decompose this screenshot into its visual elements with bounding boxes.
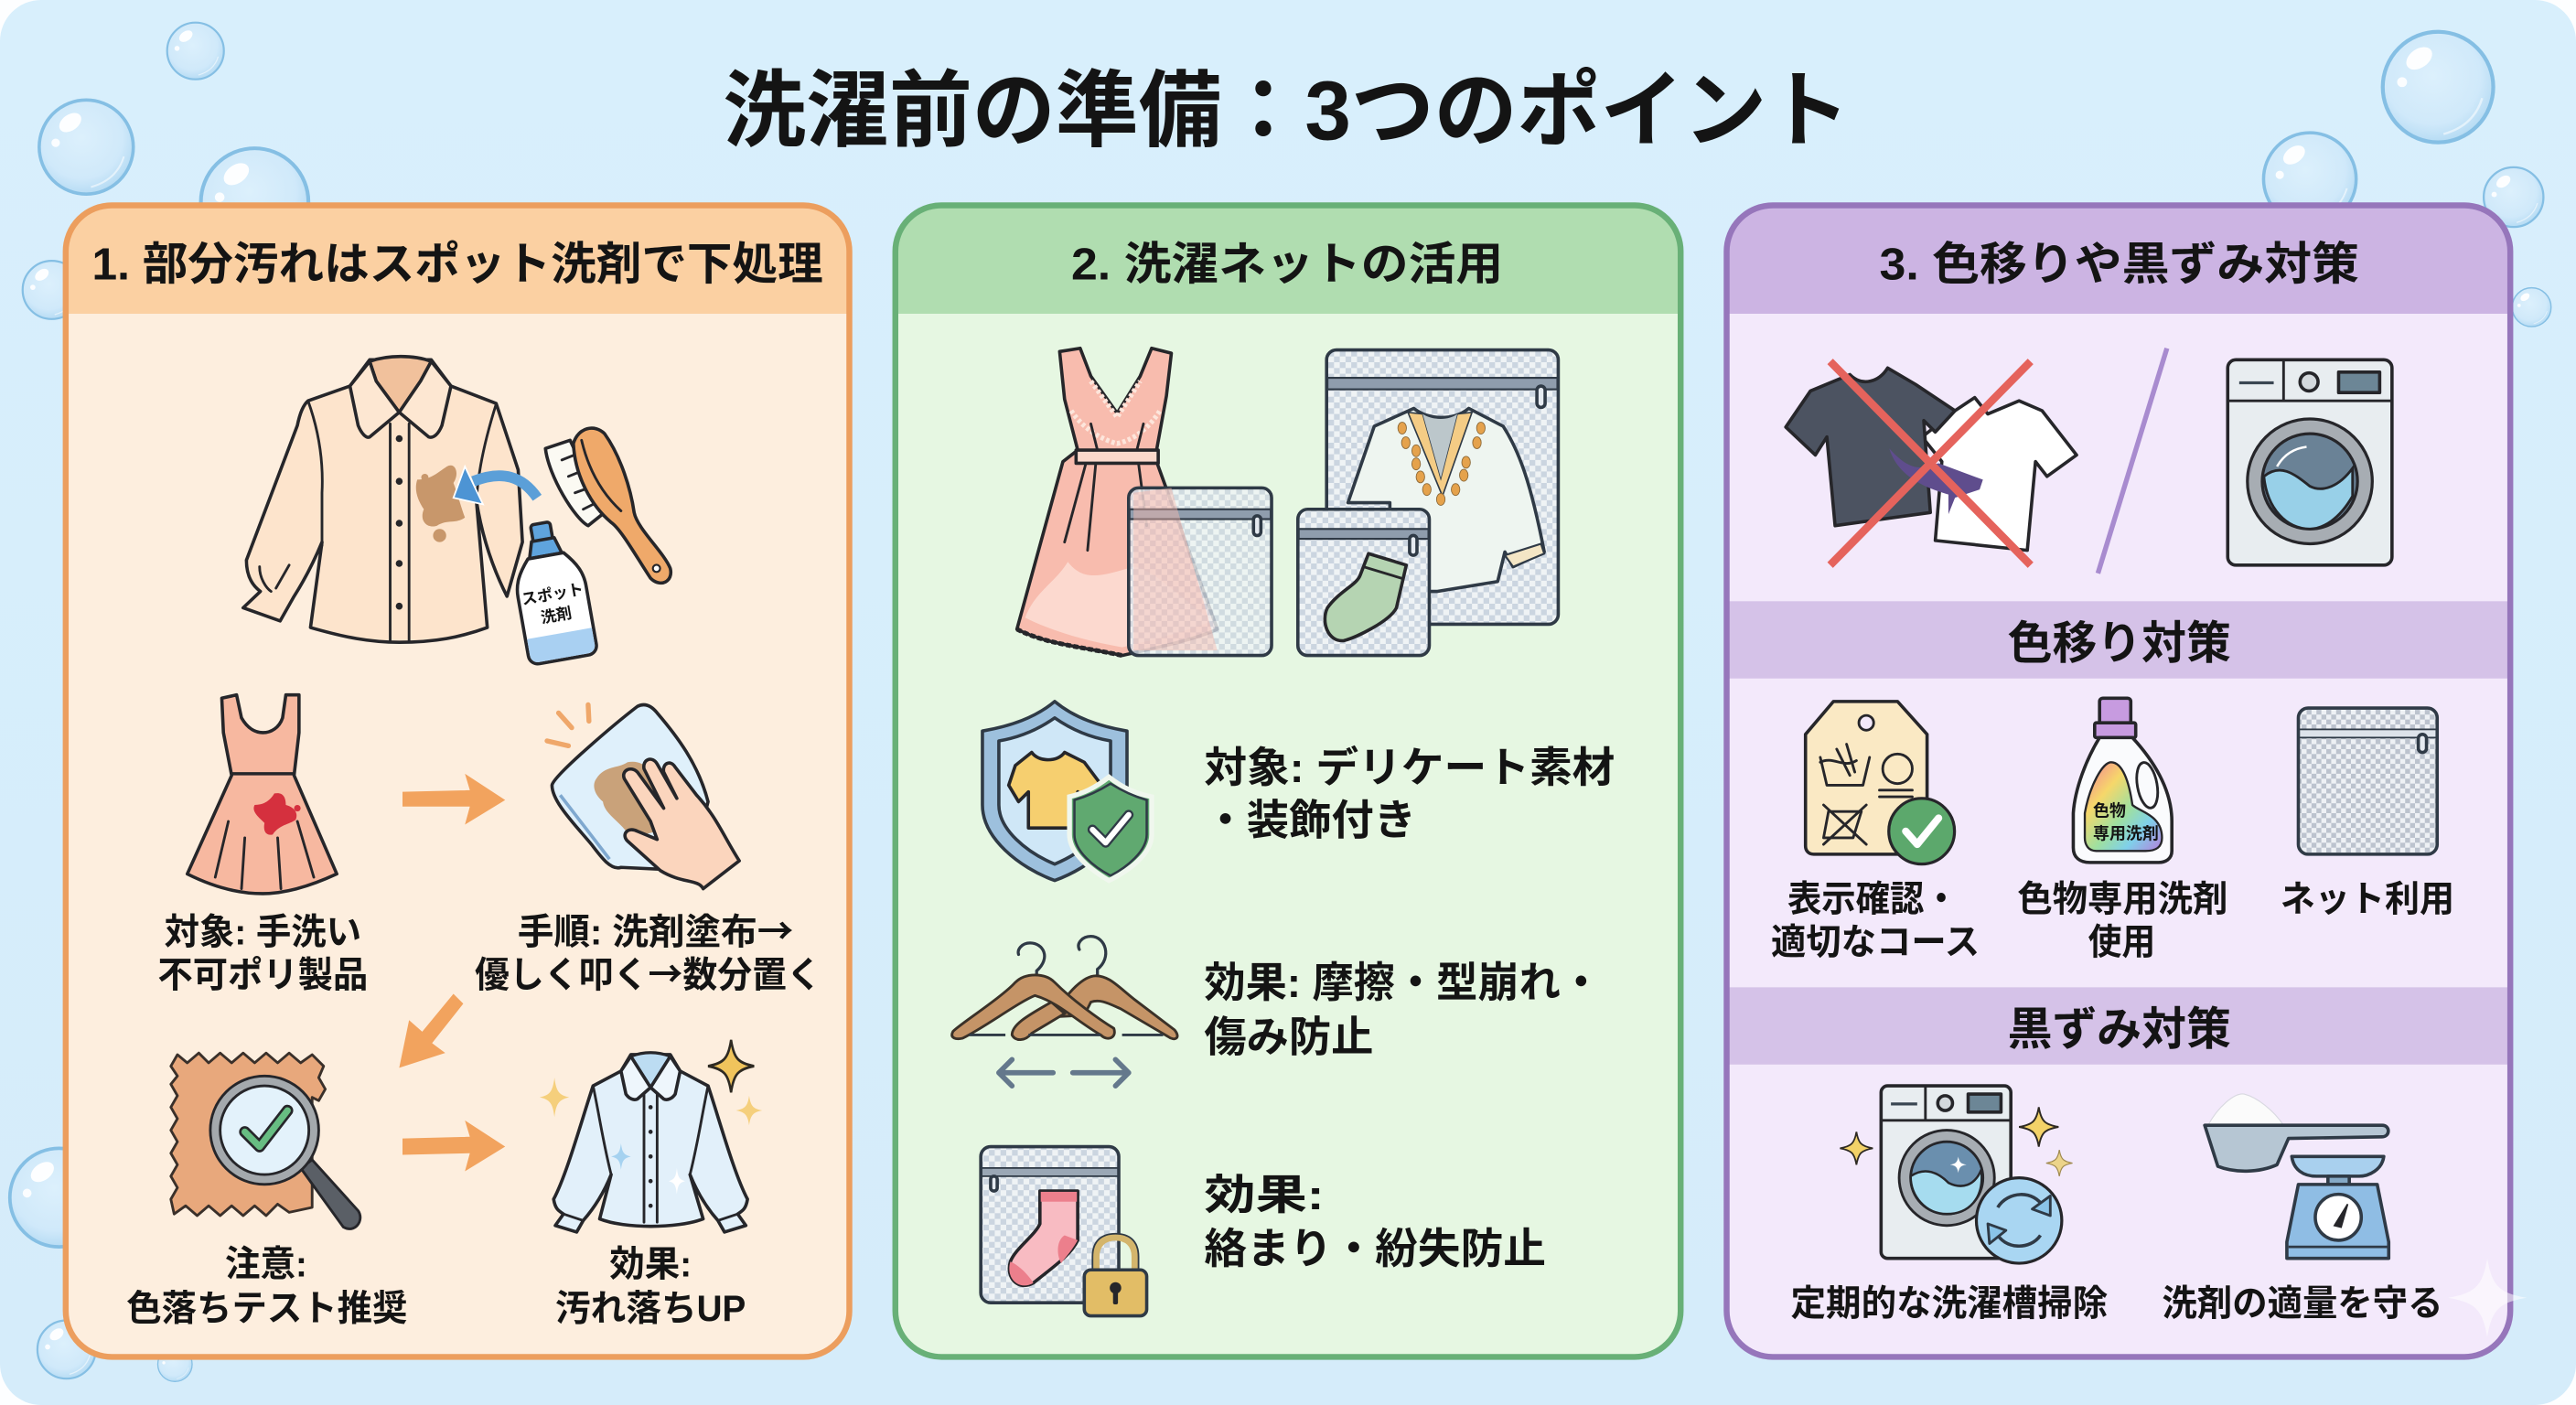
label: tub cleaning: 定期的な洗濯槽掃除 (1791, 1284, 2108, 1325)
label: check label: 表示確認・ (1787, 880, 1959, 920)
label: target: 対象: 手洗い (165, 913, 361, 953)
label: effect (555, 1244, 746, 1329)
icon: crossed out dark and white t-shirts (1786, 361, 2077, 565)
label: net effect friction: 傷み防止 (1204, 1014, 1373, 1060)
icon: dress with red stain (188, 695, 337, 894)
icon: spot detergent bottle: スポット (521, 580, 585, 608)
band label: darkening: 黒ずみ対策 (2008, 1004, 2231, 1055)
label: procedure: 手順: 洗剤塗布→ (518, 904, 793, 956)
panel 1 heading: 1. 部分汚れはスポット洗剤で下処理 (92, 239, 823, 289)
icon: clean blue shirt with sparkles (540, 1040, 762, 1232)
net: small over dress (1129, 488, 1272, 656)
title: 洗濯前の準備：3つのポイント (723, 65, 1850, 158)
label: procedure: 優しく叩く→数分置く (475, 946, 821, 998)
panel: 2 laundry nets (896, 205, 1680, 1357)
band: color transfer (1727, 601, 2510, 679)
panel 2 header band (896, 205, 1680, 314)
dress (1017, 349, 1218, 656)
panel: 1 spot treatment (66, 205, 849, 1357)
label: net effect friction (1204, 960, 1602, 1060)
band: darkening (1727, 987, 2510, 1065)
icon: stained shirt with brush and spot detergent (243, 357, 671, 665)
label: caution: 注意: (225, 1244, 307, 1284)
label: color detergent: 色物専用洗剤 (2017, 880, 2227, 920)
label: net effect tangling (1204, 1172, 1546, 1272)
decorative watermark sparkle (2448, 1259, 2527, 1337)
net: large with blouse (1326, 350, 1558, 624)
panel 2 border (896, 205, 1680, 1357)
icon: hand dabbing cloth (547, 704, 739, 889)
label: effect: 汚れ落ちUP (555, 1289, 746, 1329)
panel 3 border (1727, 205, 2510, 1357)
panel 1 border (66, 205, 849, 1357)
label: check label: 適切なコース (1771, 922, 1980, 962)
icon: color detergent bottle: 専用洗剤 (2093, 825, 2159, 843)
label: procedure (475, 904, 821, 998)
label: target (157, 913, 368, 995)
icon: washing machine (2227, 359, 2392, 565)
label: check label (1771, 880, 1980, 962)
label: caution: 色落ちテスト推奨 (126, 1289, 407, 1329)
label: caution (126, 1244, 407, 1329)
panel 2 heading: 2. 洗濯ネットの活用 (1071, 239, 1503, 289)
label: net effect tangling: 絡まり・紛失防止 (1204, 1226, 1546, 1272)
label: net target (1204, 745, 1615, 843)
icon: color detergent bottle: 色物 (2093, 801, 2126, 820)
divider slash (2098, 349, 2167, 574)
net: small with sock (1298, 509, 1429, 656)
arrow: step 3 to 4 (402, 1121, 505, 1171)
icon: color detergent bottle (2073, 698, 2172, 863)
icon: shield with t-shirt (982, 702, 1152, 881)
band label: color transfer: 色移り対策 (2008, 618, 2231, 669)
icon: spot detergent bottle: 洗剤 (540, 605, 574, 627)
panel: 3 color transfer and darkening (1727, 205, 2510, 1357)
label: net target: ・装飾付き (1204, 797, 1416, 843)
icon: delicate dress, blouse and nets (1017, 349, 1558, 656)
icon: spot detergent bottle (506, 518, 598, 665)
label: proper detergent amount: 洗剤の適量を守る (2162, 1284, 2443, 1325)
arrow: step 1 to 2 (402, 774, 505, 825)
label: net effect friction: 効果: 摩擦・型崩れ・ (1204, 960, 1602, 1006)
label: net target: 対象: デリケート素材 (1204, 745, 1615, 791)
label: effect: 効果: (609, 1244, 692, 1284)
icon: fabric swatch and magnifier (171, 1053, 360, 1228)
arrow: step 2 to 3 (399, 994, 463, 1067)
label: net effect tangling: 効果: (1204, 1172, 1325, 1218)
panel 3 header band (1727, 205, 2510, 314)
icon: washing machine cleaning cycle (1840, 1086, 2073, 1263)
label: color detergent (2017, 880, 2227, 962)
label: target: 不可ポリ製品 (157, 955, 368, 995)
panel 3 heading: 3. 色移りや黒ずみ対策 (1880, 239, 2359, 289)
icon: net with sock and padlock (981, 1147, 1147, 1316)
icon: care label with check (1806, 702, 1955, 864)
label: color detergent: 使用 (2088, 922, 2155, 962)
icon: laundry net (2298, 708, 2437, 854)
icon: hangers with arrows (952, 937, 1177, 1086)
panel 1 header band (66, 205, 849, 314)
label: net use: ネット利用 (2281, 880, 2454, 920)
icon: measuring scoop and scale (2205, 1094, 2388, 1259)
